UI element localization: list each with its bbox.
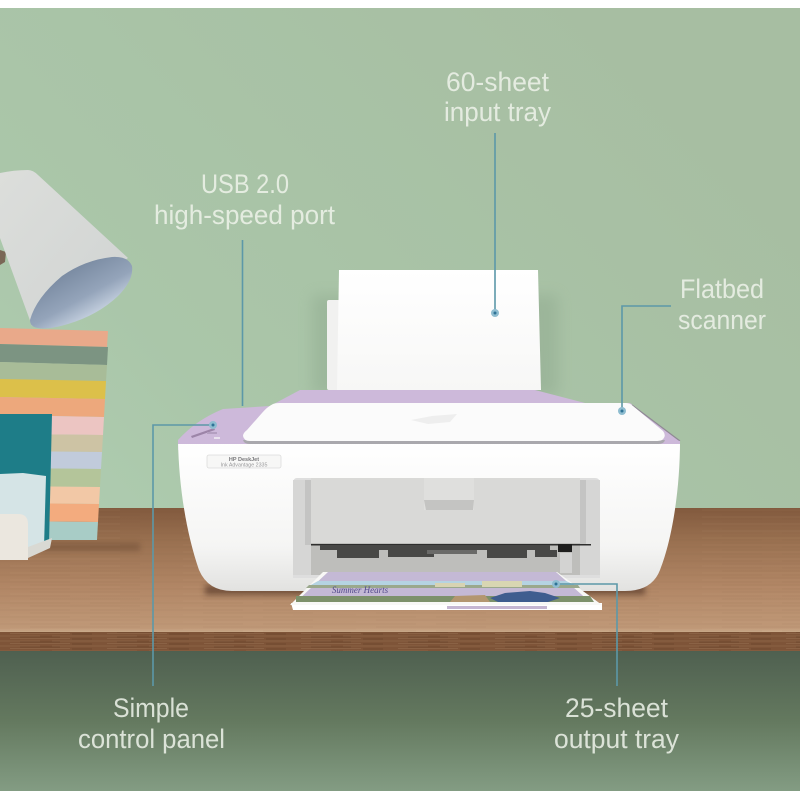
label: Simple control panel [78, 693, 225, 754]
label: Flatbed scanner: scanner [678, 305, 766, 335]
lamp arm [0, 250, 6, 265]
printer body [178, 441, 680, 591]
callout: control panel [78, 421, 225, 754]
feed rollers [311, 544, 591, 573]
leader line: output tray [552, 580, 617, 686]
lamp shade [0, 170, 128, 326]
flatbed scanner lid [243, 403, 665, 441]
teal folder [0, 414, 52, 548]
lilac top cover [178, 390, 680, 450]
label: 25-sheet output tray: 25-sheet [565, 693, 669, 723]
callout: flatbed scanner [618, 274, 766, 415]
label: 25-sheet output tray: output tray [554, 724, 680, 754]
scanner lid shadow [243, 440, 665, 444]
label: USB 2.0 high-speed port: USB 2.0 [201, 169, 289, 199]
label: 25-sheet output tray [554, 693, 680, 754]
label: USB 2.0 high-speed port [154, 169, 336, 230]
organiser shadow [40, 543, 140, 551]
desk front edge [0, 632, 800, 651]
label: 60-sheet input tray [444, 67, 552, 127]
callout: output tray [552, 580, 680, 754]
model label [207, 455, 281, 468]
control panel buttons [191, 428, 220, 439]
cover right edge [632, 405, 680, 441]
rear paper guide [327, 300, 340, 390]
printed sheet [290, 572, 602, 605]
input tray paper [337, 270, 541, 390]
label: 60-sheet input tray: input tray [444, 97, 552, 127]
desk shadow [205, 585, 645, 595]
label: Flatbed scanner: Flatbed [680, 274, 764, 304]
output tray [290, 572, 602, 610]
leader line: flatbed scanner [618, 306, 671, 415]
hp logo [411, 414, 457, 424]
pale blue paper [0, 473, 46, 548]
output tray: Summer Hearts [332, 585, 389, 595]
leader line: control panel [153, 421, 217, 686]
leader line: USB port [242, 240, 244, 406]
wall shadow [312, 295, 558, 395]
striped folder [0, 328, 108, 540]
label: Flatbed scanner [678, 274, 766, 335]
label: Simple control panel: Simple [113, 693, 189, 723]
lower dark panel [0, 651, 800, 791]
model label: HP DeskJet [229, 457, 259, 463]
body top shade [178, 438, 680, 444]
label: USB 2.0 high-speed port: high-speed port [154, 200, 336, 230]
leader line: input tray [491, 133, 499, 317]
printer [178, 270, 680, 610]
model label: Ink Advantage 2335 [221, 462, 267, 468]
callout: USB port [154, 169, 336, 406]
label: 60-sheet input tray: 60-sheet [446, 67, 550, 97]
desk organiser objects [0, 328, 140, 560]
paper stopper tab [424, 478, 474, 510]
label: Simple control panel: control panel [78, 724, 225, 754]
white holder [0, 514, 28, 560]
desk surface [0, 508, 800, 632]
lamp opening [30, 257, 132, 328]
callout: input tray [444, 67, 552, 317]
lamp [0, 170, 132, 328]
output opening [293, 478, 600, 578]
background: wall [0, 8, 800, 509]
